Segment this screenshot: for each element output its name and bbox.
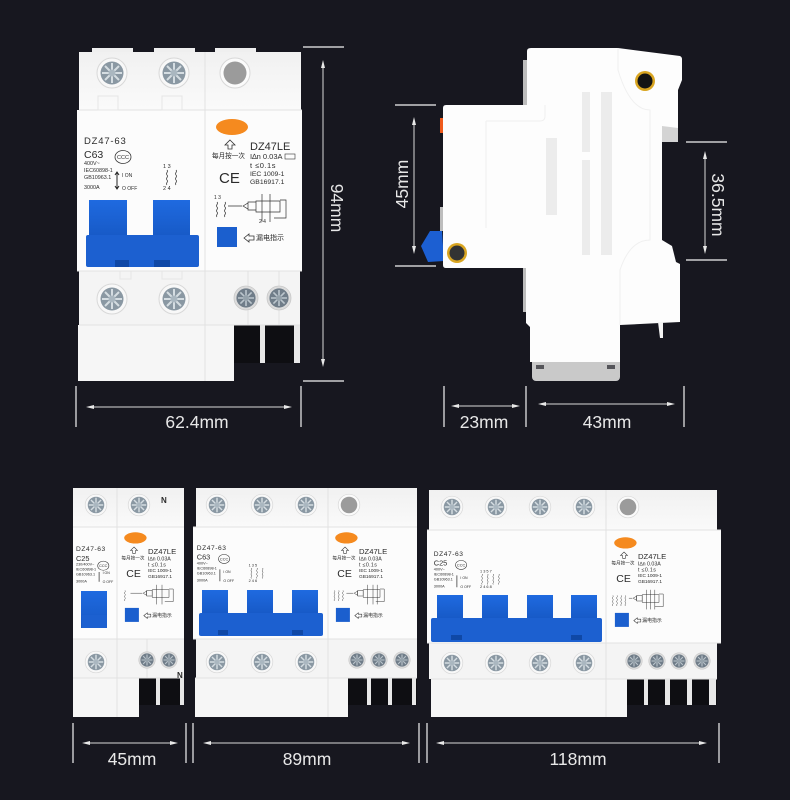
- breaker label: I ON: [223, 570, 231, 574]
- terminal screws: [97, 58, 291, 314]
- leakage module label: t ≤0.1s: [359, 563, 377, 569]
- dimension: 62.4mm width: 62.4mm: [165, 412, 229, 432]
- breaker label: [434, 551, 499, 589]
- dimension: 118mm width: 118mm: [549, 749, 607, 769]
- dimension: 23mm: 23mm: [460, 412, 508, 432]
- breaker label: 1 3 5 7: [480, 570, 492, 574]
- breaker label: 1 3 5: [249, 564, 257, 568]
- dimension: 45mm depth: [392, 105, 436, 266]
- leakage module label: CE: [219, 170, 240, 187]
- breaker label: O OFF: [223, 579, 234, 583]
- breaker label: 400V~: [84, 161, 100, 167]
- dimension: 118mm width: [427, 723, 719, 769]
- leakage module label: 1 3: [214, 195, 221, 201]
- breaker label: 3000A: [197, 578, 208, 582]
- neutral marks: N: [161, 496, 167, 505]
- rail slots: [536, 365, 615, 369]
- dimension: 94mm height: 94mm: [327, 184, 347, 232]
- embossed side text: [546, 92, 612, 255]
- panel: 2-pole breaker front view: [77, 48, 302, 381]
- breaker label: IEC60898-1: [76, 568, 96, 572]
- dimension: 62.4mm width: [76, 386, 301, 432]
- breaker label: DZ47-63: [76, 546, 106, 553]
- leakage module label: 每月按一次: [121, 555, 145, 562]
- leakage module label: CE: [616, 573, 631, 585]
- leakage module label: [332, 532, 387, 622]
- breaker label: GB10963.1: [84, 175, 111, 181]
- breaker label: [197, 545, 263, 583]
- leakage module label: 2 4: [259, 219, 266, 225]
- leakage module label: 漏电指示: [256, 233, 284, 242]
- leakage module label: I∆n 0.03A: [250, 152, 283, 161]
- breaker label: CCC: [457, 563, 465, 567]
- breaker label: CCC: [220, 557, 228, 561]
- dimension: 43mm: 43mm: [583, 412, 631, 432]
- leakage module label: [611, 537, 666, 627]
- breaker label: DZ47-63: [434, 551, 464, 558]
- breaker label: C63: [197, 553, 210, 562]
- dimension: 89mm width: 89mm: [283, 749, 331, 769]
- din clips: [658, 322, 663, 338]
- blue toggle handle: [81, 591, 107, 628]
- dimension: 36.5mm rail: [686, 142, 728, 260]
- dimension: 45mm width: [73, 723, 186, 769]
- side silhouette: [443, 48, 682, 362]
- leakage module label: DZ47LE: [250, 141, 290, 153]
- leakage module label: I∆n 0.03A: [148, 556, 171, 562]
- panel: 3-pole breaker: [193, 488, 417, 717]
- leakage module label: 漏电指示: [363, 612, 383, 619]
- breaker label: CCC: [99, 564, 108, 568]
- breaker label: GB10963.1: [434, 577, 453, 581]
- orange test button edge: [440, 118, 445, 133]
- breaker body: [73, 488, 184, 717]
- leakage module label: GB16917.1: [250, 179, 285, 186]
- dimension: 94mm height: [303, 47, 347, 381]
- grey back parts: [440, 60, 678, 381]
- breaker label: 1 3: [163, 164, 171, 170]
- leakage module label: t ≤0.1s: [250, 161, 276, 170]
- leakage module label: IEC 1009-1: [148, 568, 172, 574]
- leakage module label: GB16917.1: [148, 574, 172, 580]
- dimension: 89mm width: [193, 723, 419, 769]
- blue toggle handle: [86, 200, 199, 267]
- leakage module label: IEC 1009-1: [638, 573, 662, 579]
- leakage module label: DZ47LE: [638, 552, 666, 561]
- leakage module label: DZ47LE: [359, 547, 387, 556]
- breaker label: 3000A: [76, 580, 87, 584]
- breaker label: 400V~: [434, 568, 446, 572]
- breaker label: 2 4 6: [249, 579, 257, 583]
- breaker label: C25: [434, 559, 447, 568]
- neutral marks: [161, 496, 183, 680]
- breaker label: I ON: [103, 571, 110, 575]
- leakage module label: IEC 1009-1: [359, 568, 383, 574]
- leakage module label: [121, 532, 176, 622]
- leakage module label: IEC 1009-1: [250, 171, 285, 178]
- breaker label: 2 4: [163, 186, 171, 192]
- breaker label: 3000A: [84, 185, 100, 191]
- leakage module label: GB16917.1: [638, 579, 662, 585]
- neutral marks: N: [177, 671, 183, 680]
- breaker label: O OFF: [103, 580, 113, 584]
- breaker label: [76, 546, 113, 584]
- terminal screws: [441, 496, 710, 674]
- breaker label: 3000A: [434, 584, 445, 588]
- panel: breaker side view: [421, 48, 682, 381]
- terminal screws: [85, 494, 177, 673]
- breaker label: 400V~: [197, 562, 209, 566]
- breaker label: O OFF: [460, 585, 471, 589]
- breaker label: 230/400V~: [76, 563, 95, 567]
- breaker label: IEC60898-1: [84, 168, 113, 174]
- dimension: 36.5mm rail: 36.5mm: [708, 173, 728, 237]
- breaker body: [427, 490, 721, 717]
- blue handle side: [421, 231, 444, 262]
- terminal screws: [206, 494, 410, 673]
- side panel details: [486, 48, 650, 325]
- dimension: 45mm depth: 45mm: [392, 160, 412, 208]
- leakage module label: CE: [337, 568, 352, 580]
- blue toggle handle: [199, 590, 323, 636]
- panel: 1P+N breaker: [73, 488, 184, 717]
- breaker label: IEC60898-1: [197, 566, 217, 570]
- leakage module label: 漏电指示: [642, 617, 662, 624]
- leakage module label: 每月按一次: [212, 151, 245, 160]
- panel: 4-pole breaker: [427, 490, 721, 717]
- leakage module label: t ≤0.1s: [638, 568, 656, 574]
- breaker label: DZ47-63: [84, 136, 127, 147]
- leakage module label: CE: [126, 568, 141, 580]
- leakage module label: GB16917.1: [359, 574, 383, 580]
- breaker label: GB10963.1: [197, 571, 216, 575]
- breaker label: C25: [76, 554, 89, 563]
- breaker label: I ON: [122, 173, 133, 179]
- dimension: 45mm width: 45mm: [108, 749, 156, 769]
- breaker label: I ON: [460, 576, 468, 580]
- dimension: 43mm: [538, 386, 684, 432]
- dimension: 23mm: [444, 386, 526, 432]
- leakage module label: I∆n 0.03A: [638, 561, 661, 567]
- leakage module label: 每月按一次: [611, 560, 635, 567]
- breaker label: 2 4 6 8: [480, 585, 492, 589]
- breaker label: C63: [84, 149, 103, 161]
- breaker label: IEC60898-1: [434, 572, 454, 576]
- breaker label: CCC: [117, 155, 129, 161]
- leakage module label: t ≤0.1s: [148, 563, 166, 569]
- leakage module label: DZ47LE: [148, 547, 176, 556]
- breaker label: [84, 136, 177, 192]
- brass rivets: [447, 71, 655, 263]
- breaker label: DZ47-63: [197, 545, 227, 552]
- leakage module label: I∆n 0.03A: [359, 556, 382, 562]
- breaker label: O OFF: [122, 186, 137, 192]
- breaker body: [77, 48, 302, 381]
- leakage module label: 漏电指示: [152, 612, 172, 619]
- leakage module label: 每月按一次: [332, 555, 356, 562]
- blue toggle handle: [431, 595, 602, 642]
- breaker label: GB10963.1: [76, 573, 95, 577]
- leakage module label: [212, 119, 295, 247]
- breaker body: [193, 488, 417, 717]
